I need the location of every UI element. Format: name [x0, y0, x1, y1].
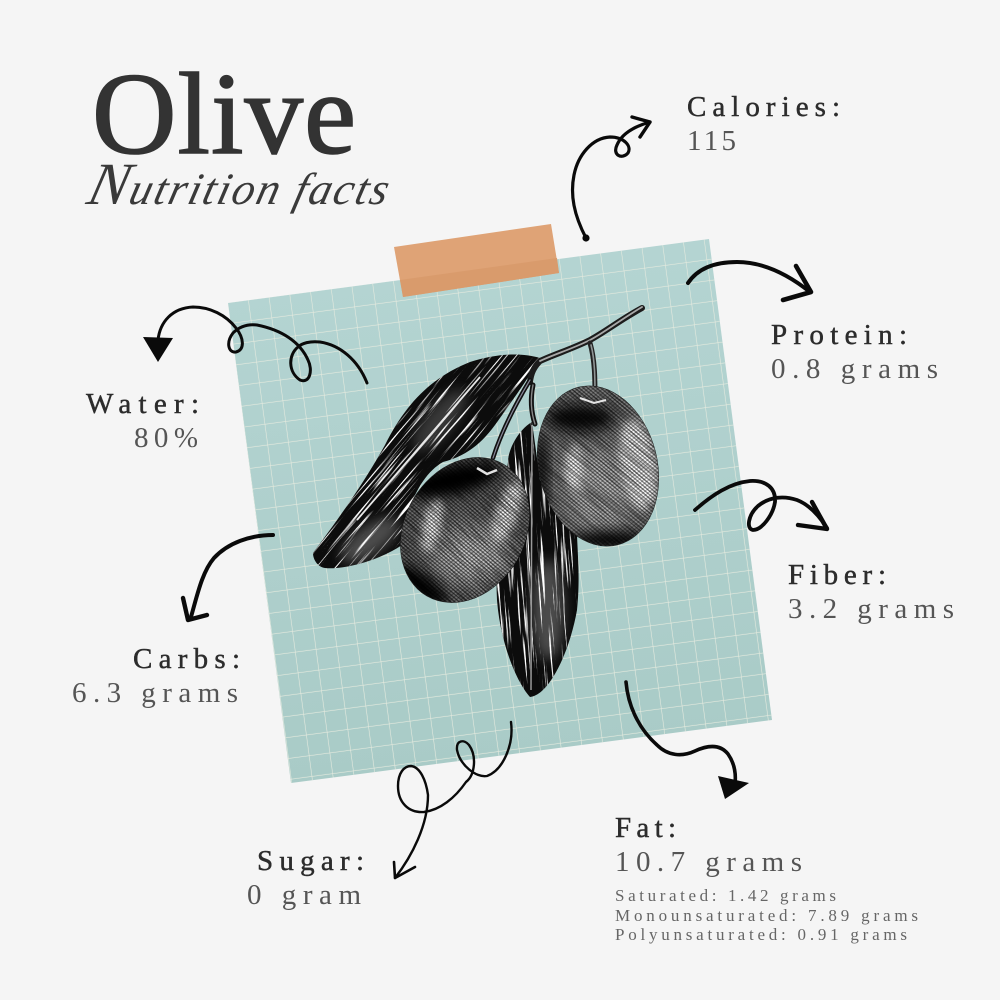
title: Olive: Olive [92, 50, 356, 179]
text: fat breakdown: Saturated: 1.42 grams [615, 886, 836, 905]
text: protein: Protein: [771, 319, 907, 351]
panel: grid paper note [228, 239, 772, 783]
arrow: sugar [394, 722, 511, 878]
text: fiber: Fiber: [788, 559, 886, 591]
arrow: protein [688, 262, 811, 300]
text: water: 80% [134, 422, 198, 454]
text: calories [687, 91, 840, 157]
arrow: fat [626, 682, 749, 799]
text: sugar: 0 gram [247, 879, 361, 911]
text: calories: Calories: [687, 91, 840, 123]
text: carbs [72, 643, 240, 709]
text: sugar [247, 845, 364, 911]
illustration: olive branch [313, 305, 659, 697]
text: fiber: 3.2 grams [788, 593, 954, 625]
text: calories: 115 [687, 125, 736, 157]
lower olive [400, 457, 530, 603]
arrow: water [143, 307, 367, 383]
vertical leaf [496, 422, 579, 697]
text: carbs: Carbs: [133, 643, 240, 675]
text: sugar: Sugar: [257, 845, 364, 877]
text: fat: 10.7 grams [615, 846, 802, 878]
text: fat breakdown [615, 886, 918, 944]
arrow: carbs [183, 535, 273, 620]
diagonal leaf [313, 354, 540, 568]
text: fat [615, 812, 918, 944]
icon: orange tape [394, 224, 559, 297]
text: protein [771, 319, 938, 385]
text: fat: Fat: [615, 812, 676, 844]
subtitle: Nutrition facts: Nutrition facts [81, 152, 398, 218]
text: fiber [788, 559, 954, 625]
stems [493, 307, 642, 458]
text: fat breakdown: Monounsaturated: 7.89 grams [615, 906, 918, 925]
text: carbs: 6.3 grams [72, 677, 238, 709]
arrow: calories [572, 117, 650, 242]
arrow: fiber [695, 481, 827, 530]
text: water: Water: [86, 388, 199, 420]
text: protein: 0.8 grams [771, 353, 938, 385]
text: fat breakdown: Polyunsaturated: 0.91 grams [615, 925, 907, 944]
text: water [86, 388, 199, 454]
upper olive [537, 386, 659, 546]
